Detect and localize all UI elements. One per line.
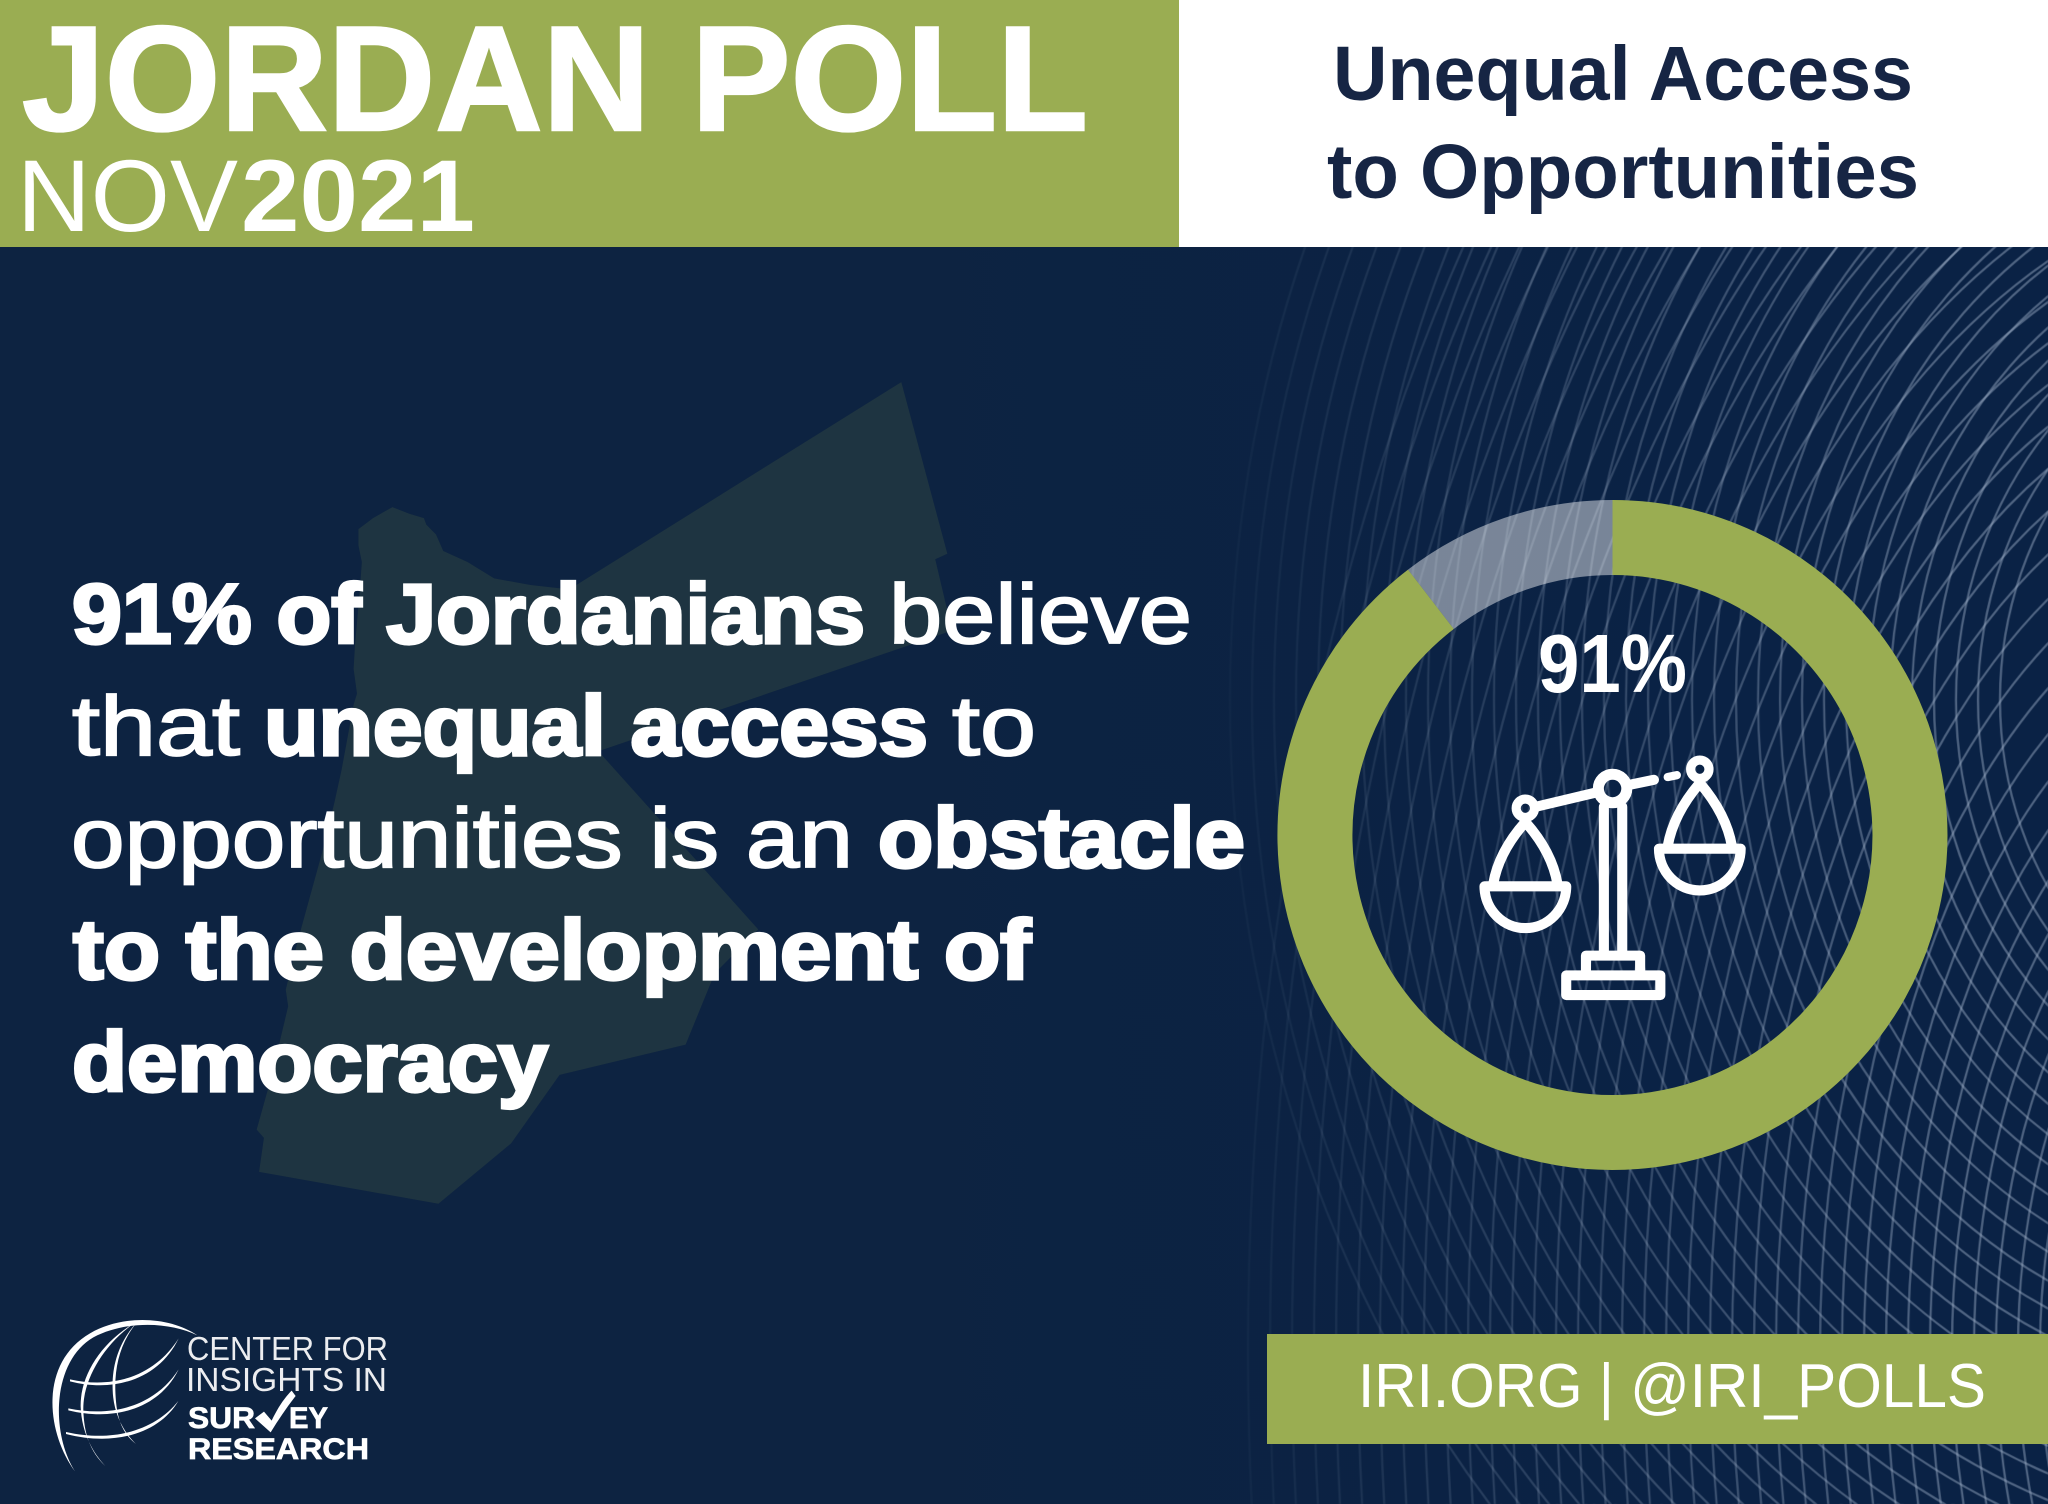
topic heading: to Opportunities bbox=[1327, 129, 1919, 215]
donut chart: 91% bbox=[1315, 538, 1910, 1132]
main statement text: to bbox=[952, 679, 1036, 773]
logo wordmark: EY bbox=[289, 1402, 328, 1435]
logo wordmark: INSIGHTS IN bbox=[186, 1361, 387, 1398]
header: white topic panel bbox=[1179, 0, 2048, 247]
topic heading bbox=[1327, 31, 1919, 215]
main statement text: that bbox=[72, 679, 240, 773]
main statement text: unequal access bbox=[264, 679, 928, 773]
topic heading: Unequal Access bbox=[1333, 31, 1913, 117]
icon: balance scales bbox=[1484, 760, 1741, 995]
logo wordmark: RESEARCH bbox=[188, 1433, 369, 1466]
logo: Center for Insights in Survey Research bbox=[52, 1320, 388, 1471]
main statement text: to the development of bbox=[73, 903, 1032, 997]
remaining segment of donut bbox=[1431, 538, 1612, 599]
main statement text: obstacle bbox=[878, 791, 1245, 885]
background mesh pattern bbox=[1100, 247, 2048, 1504]
title: Jordan Poll: JORDAN POLL bbox=[22, 0, 1088, 162]
header: green title panel bbox=[0, 0, 1179, 253]
logo wordmark: CENTER FOR bbox=[187, 1330, 388, 1367]
date: Nov 2021: 2021 bbox=[241, 139, 475, 253]
main statement text: opportunities is an bbox=[71, 791, 853, 885]
logo wordmark bbox=[186, 1330, 388, 1466]
footer: web and social link bar bbox=[1267, 1334, 2048, 1444]
main statement text: democracy bbox=[72, 1015, 548, 1109]
link text: IRI.ORG | @IRI_POLLS bbox=[1358, 1351, 1986, 1421]
map of Jordan silhouette bbox=[257, 382, 952, 1204]
main statement text: believe bbox=[889, 567, 1192, 661]
icon: globe bbox=[52, 1320, 197, 1471]
date: Nov 2021: NOV bbox=[17, 139, 238, 253]
main statement text bbox=[71, 567, 1245, 1109]
main statement text: 91% of Jordanians bbox=[72, 567, 865, 661]
donut value label: 91% bbox=[1538, 617, 1687, 710]
logo wordmark: SUR bbox=[188, 1402, 255, 1435]
